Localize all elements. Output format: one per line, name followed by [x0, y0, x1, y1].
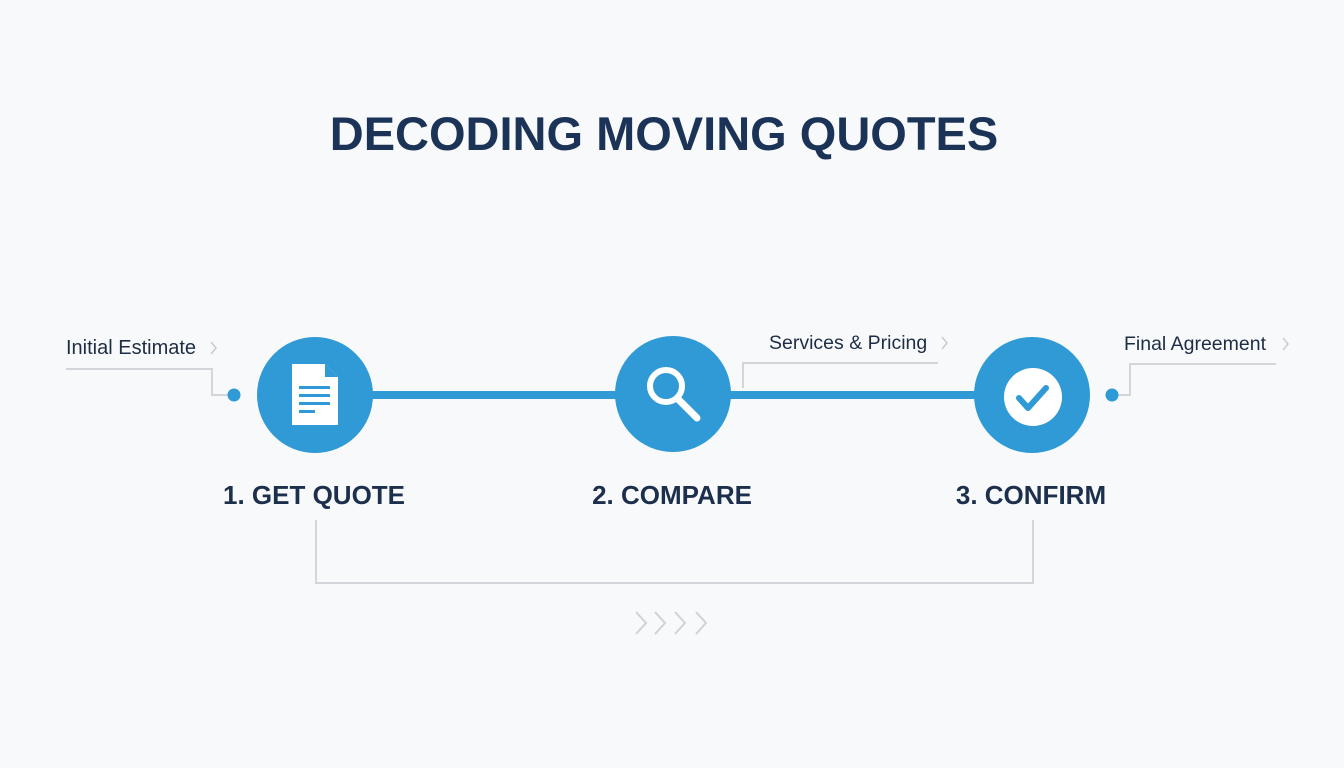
callout: final agreement: [1106, 333, 1288, 402]
step 3: confirm: [956, 337, 1106, 510]
title: DECODING MOVING QUOTES: [330, 107, 998, 160]
callout: final agreement: Final Agreement: [1124, 333, 1267, 355]
step 1: get quote: 1. GET QUOTE: [223, 480, 405, 510]
bottom bracket: [316, 520, 1033, 583]
callout: services & pricing: Services & Pricing: [769, 332, 927, 354]
icon: document: [257, 337, 373, 453]
callout: initial estimate: Initial Estimate: [66, 337, 196, 359]
timeline line: [370, 391, 980, 399]
step 3: confirm: 3. CONFIRM: [956, 480, 1106, 510]
step 1: get quote: [223, 337, 405, 510]
icon: check: [974, 337, 1090, 453]
callout: services & pricing: [743, 332, 947, 388]
icon: magnifier: [615, 336, 731, 452]
callout: initial estimate: [66, 337, 240, 402]
arrow: chevrons: [636, 612, 706, 634]
step 2: compare: [592, 336, 752, 510]
step 2: compare: 2. COMPARE: [592, 480, 752, 510]
